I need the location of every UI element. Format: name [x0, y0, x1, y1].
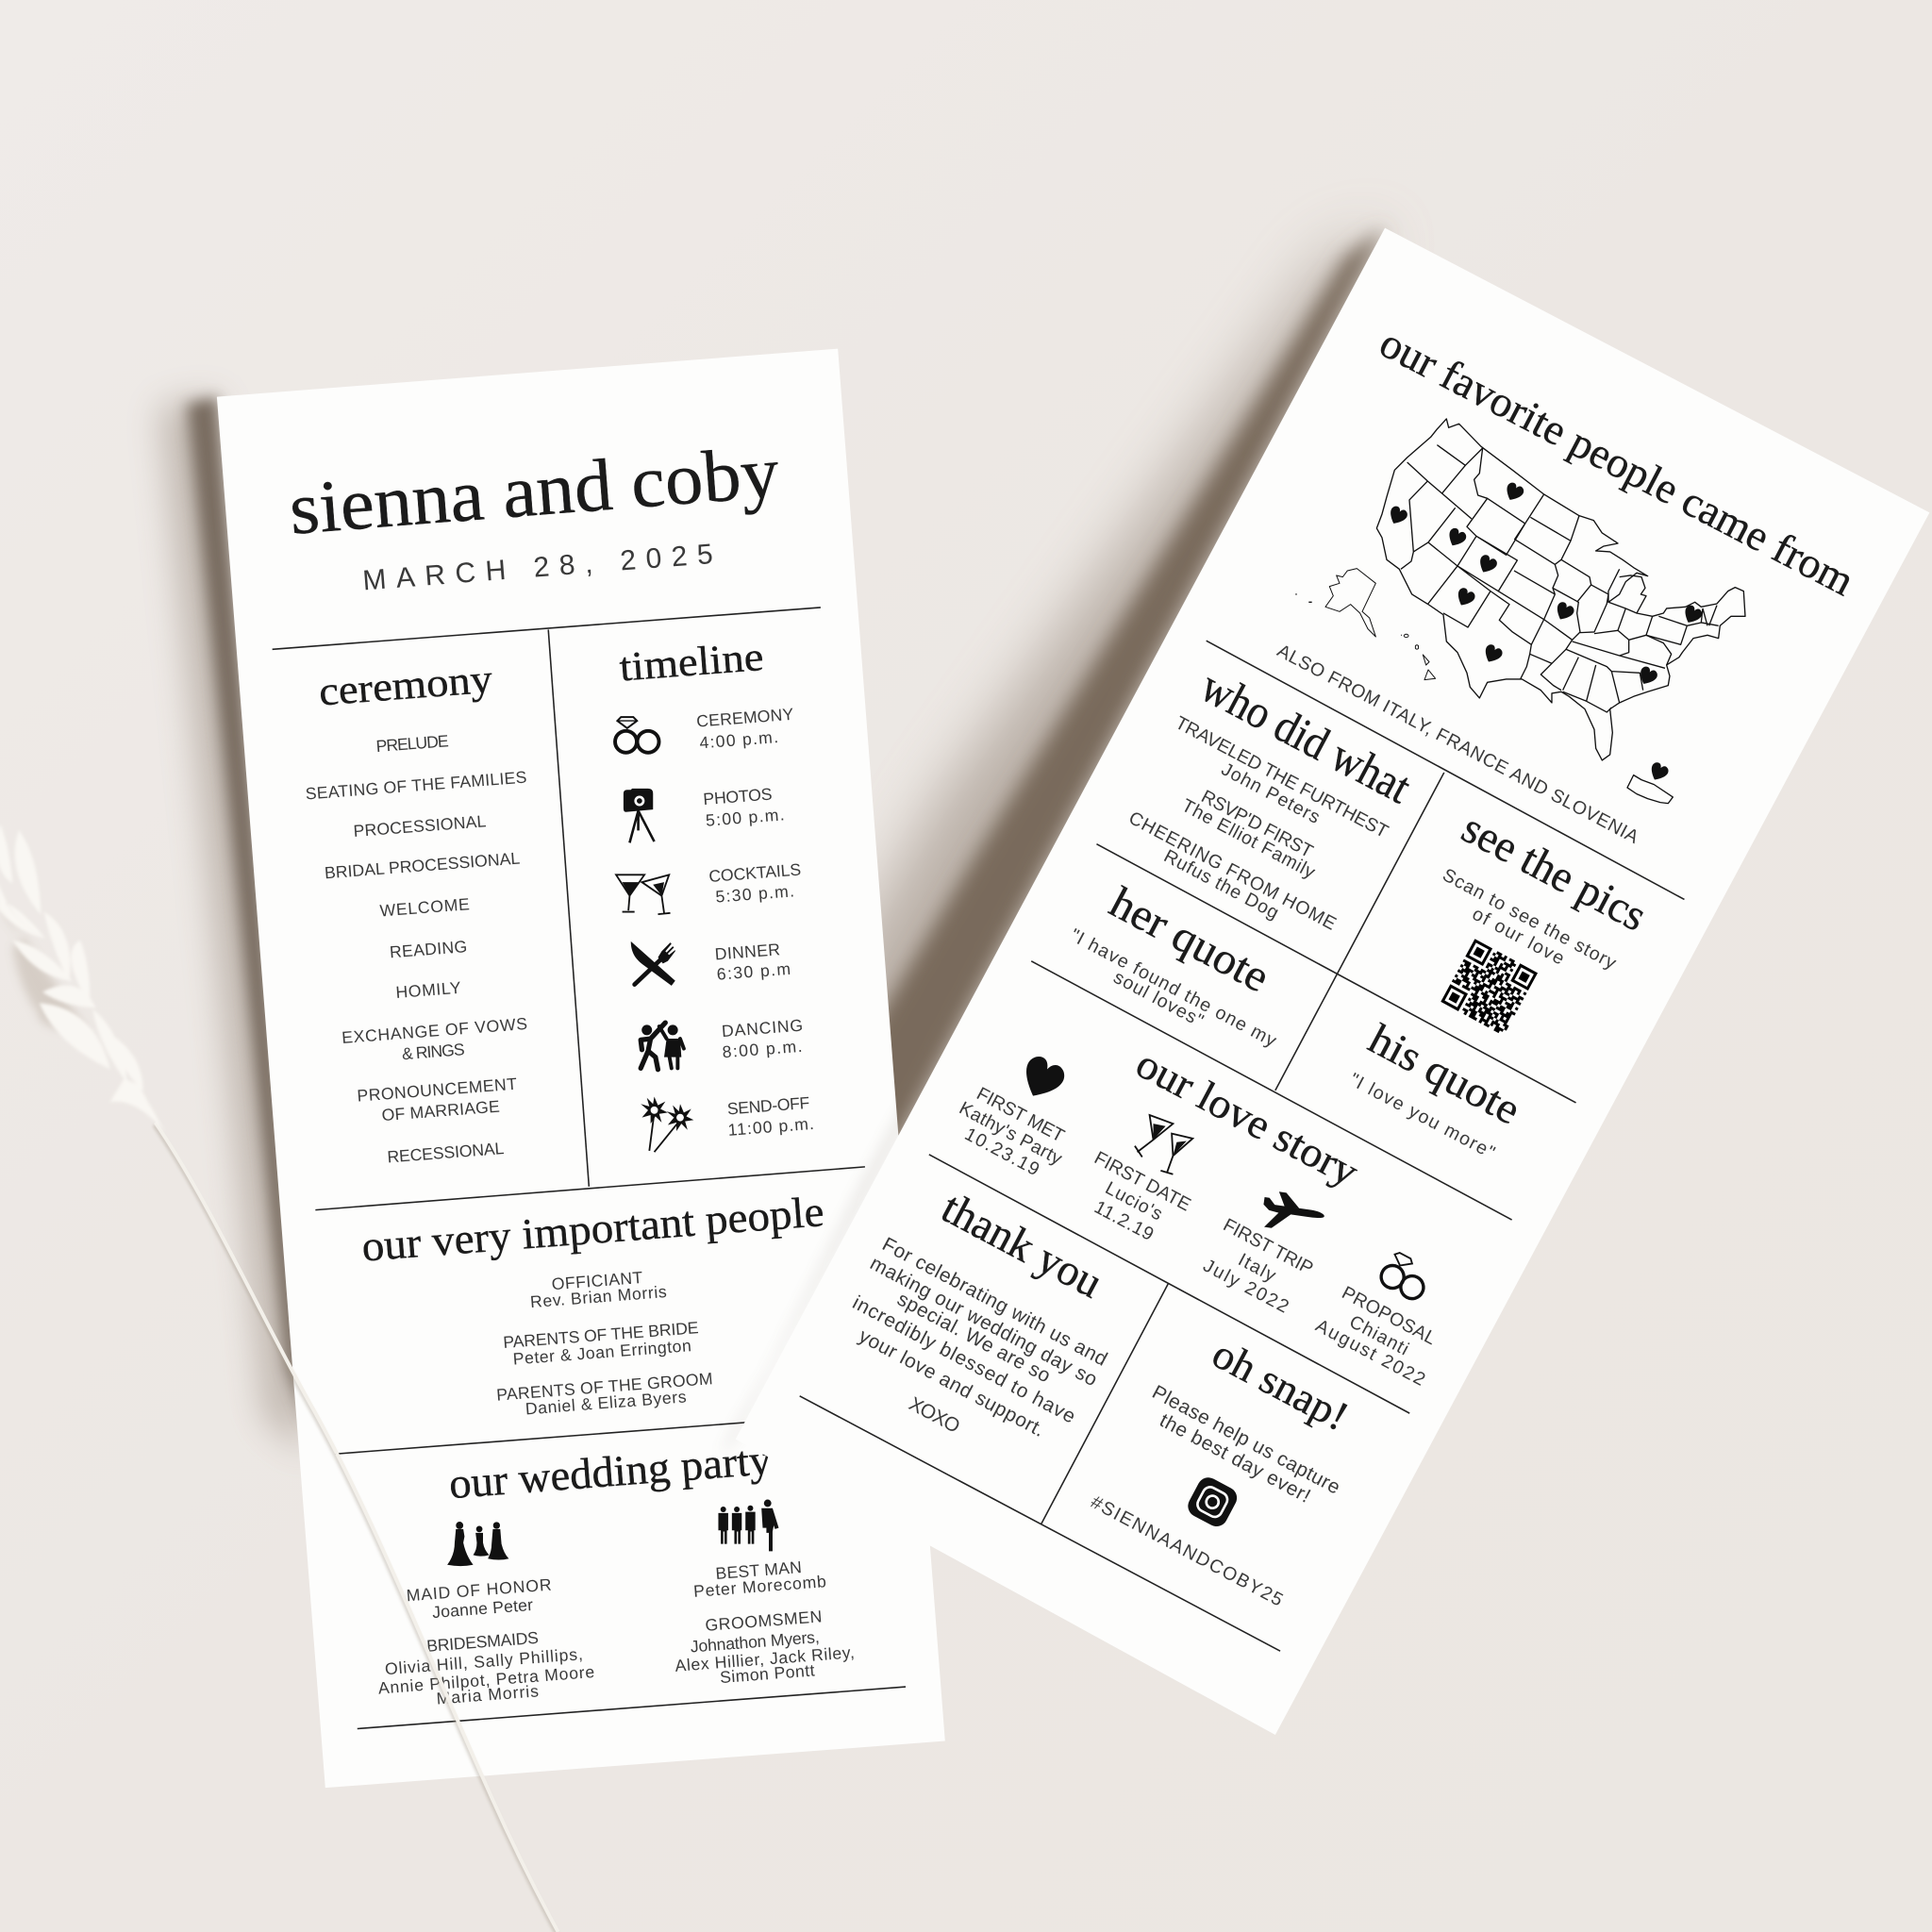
ceremony order list: PRONOUNCEMENT — [357, 1074, 518, 1106]
names list: OFFICIANT — [551, 1268, 643, 1293]
heading: her quote — [1102, 878, 1277, 1002]
awards list: CHEERING FROM HOME — [1125, 808, 1340, 935]
ceremony order list: BRIDAL PROCESSIONAL — [324, 848, 521, 882]
first date text — [1091, 1147, 1194, 1245]
icon: cocktail glasses — [1135, 1115, 1192, 1174]
shadow of right card, dark core — [677, 228, 1385, 1392]
heading: our very important people — [360, 1187, 825, 1271]
icon: cocktail glasses — [616, 874, 671, 914]
awards list: John Peters — [1218, 758, 1324, 828]
heading: our love story — [1128, 1040, 1367, 1196]
proposal text: PROPOSAL — [1339, 1282, 1440, 1349]
stem — [154, 1123, 558, 1932]
text: dinner time: DINNER — [714, 940, 781, 964]
date: MARCH 28, 2025 — [361, 539, 714, 597]
quote text: "I love you more" — [1346, 1069, 1498, 1163]
thank you message: XOXO — [906, 1393, 963, 1438]
proposal text — [1312, 1282, 1440, 1391]
icon: instagram — [1184, 1474, 1241, 1530]
first trip text: July 2022 — [1200, 1256, 1292, 1318]
ceremony order list: & RINGS — [401, 1040, 465, 1063]
text: photos time: PHOTOS — [703, 785, 773, 808]
panel: her quote — [1067, 878, 1280, 1052]
shadow of left card, soft — [160, 397, 308, 1454]
text: also from: ALSO FROM ITALY, FRANCE AND SLOVENIA — [1274, 641, 1642, 848]
thank you message: special. We are so — [893, 1288, 1054, 1387]
text: send-off time: SEND-OFF — [726, 1093, 810, 1118]
awards list: RSVP'D FIRST — [1198, 786, 1316, 862]
bride side names: Olivia Hill, Sally Phillips, — [384, 1644, 583, 1678]
panel: left card, wedding program — [217, 349, 945, 1788]
title: sienna and coby — [287, 430, 782, 550]
thank you message: making our wedding day so — [867, 1253, 1101, 1391]
names list: Peter & Joan Errington — [512, 1336, 691, 1369]
heading: oh snap! — [1205, 1329, 1357, 1440]
names list: PARENTS OF THE BRIDE — [503, 1318, 699, 1352]
groom side names: Johnathon Myers, — [690, 1627, 820, 1657]
heading: who did what — [1192, 660, 1420, 813]
bride side names: BRIDESMAIDS — [426, 1628, 540, 1656]
panel: right card, guest details — [736, 228, 1929, 1735]
heading: ceremony: ceremony — [317, 658, 494, 715]
proposal text: Chianti — [1346, 1311, 1412, 1359]
text: dinner time: 6:30 p.m — [716, 959, 791, 984]
groom side names: Alex Hillier, Jack Riley, — [675, 1642, 855, 1675]
bride side names: Annie Philpot, Petra Moore — [377, 1662, 595, 1698]
icon: wedding rings — [615, 717, 659, 753]
names list: Daniel & Eliza Byers — [525, 1387, 687, 1418]
text: photos time: 5:00 p.m. — [705, 805, 785, 830]
icon: bridesmaids silhouettes — [447, 1522, 508, 1566]
panel: who did what — [1125, 660, 1420, 935]
text: photos time — [703, 785, 785, 830]
text: dancing time: 8:00 p.m. — [722, 1037, 803, 1061]
text: cocktails time — [708, 860, 802, 907]
text: ceremony time — [696, 705, 794, 752]
ceremony order list: WELCOME — [379, 894, 470, 920]
ceremony order list: OF MARRIAGE — [381, 1097, 500, 1124]
names list: PARENTS OF THE GROOM — [495, 1369, 713, 1405]
panel: thank you — [849, 1183, 1111, 1441]
awards list: Rufus the Dog — [1160, 845, 1282, 924]
text: send-off time: 11:00 p.m. — [727, 1114, 815, 1140]
first date text: Lucio's — [1102, 1177, 1166, 1225]
icon: dancing couple — [641, 1023, 684, 1070]
US map with hearts — [1295, 419, 1745, 804]
bride side names — [377, 1575, 595, 1708]
ceremony order list: READING — [389, 937, 468, 961]
groom side names: GROOMSMEN — [705, 1607, 823, 1635]
panel: our love story — [956, 1040, 1440, 1391]
text: Please help us capture — [1149, 1381, 1343, 1499]
names list: Rev. Brian Morris — [529, 1282, 668, 1311]
awards list: The Elliot Family — [1178, 795, 1319, 883]
thank you message: your love and support. — [855, 1325, 1048, 1441]
panel: his quote — [1346, 1014, 1528, 1163]
ceremony order list: HOMILY — [395, 978, 462, 1002]
text: dinner time — [714, 940, 791, 984]
icon: sparklers — [641, 1096, 693, 1152]
shadow of right card, soft penumbra — [628, 228, 1385, 1343]
groom side names: Peter Morecomb — [692, 1572, 827, 1601]
first trip text — [1200, 1214, 1316, 1318]
panel: oh snap — [1088, 1329, 1357, 1610]
panel: see the pics — [1439, 804, 1655, 1036]
proposal text: August 2022 — [1312, 1315, 1428, 1391]
icon: camera on tripod — [624, 789, 655, 842]
quote text: "I have found the one my — [1067, 924, 1280, 1052]
panel: timeline — [615, 635, 815, 1152]
heading: see the pics — [1454, 804, 1655, 941]
first date text: FIRST DATE — [1091, 1147, 1194, 1216]
ceremony order list: RECESSIONAL — [387, 1139, 505, 1167]
ceremony order list: PRELUDE — [375, 731, 449, 756]
heading: our wedding party — [447, 1435, 773, 1507]
hashtag: #SIENNAANDCOBY25 — [1088, 1491, 1287, 1610]
feathery seed head — [0, 824, 165, 1132]
awards list — [1125, 712, 1391, 935]
ceremony order list: EXCHANGE OF VOWS — [341, 1014, 528, 1047]
first met text: FIRST MET — [974, 1083, 1068, 1147]
icon: groomsmen silhouettes — [718, 1500, 778, 1551]
heading: his quote — [1361, 1014, 1528, 1134]
first trip text: FIRST TRIP — [1220, 1214, 1316, 1279]
heading: our favorite people came from: our favorite people came from — [1373, 318, 1862, 605]
bride side names: Maria Morris — [436, 1681, 540, 1708]
bride side names: Joanne Peter — [431, 1595, 534, 1622]
text: ceremony time: 4:00 p.m. — [699, 727, 779, 752]
text: Scan to see the story — [1439, 864, 1620, 974]
heading: timeline: timeline — [618, 635, 765, 691]
thank you message: incredibly blessed to have — [849, 1291, 1079, 1428]
panel: ceremony — [305, 658, 528, 1167]
groom side names: Simon Pontt — [719, 1660, 815, 1687]
quote text: soul loves" — [1110, 967, 1207, 1031]
ceremony order list — [305, 731, 528, 1167]
icon: crossed knife and fork — [631, 941, 675, 986]
text: send-off time — [726, 1093, 815, 1140]
bride side names: MAID OF HONOR — [406, 1575, 552, 1605]
ceremony order list: PROCESSIONAL — [353, 811, 487, 841]
map outline and state lines — [1295, 419, 1745, 804]
icon: QR code — [1441, 939, 1538, 1036]
first trip text: Italy — [1235, 1249, 1279, 1287]
text: ceremony time: CEREMONY — [696, 705, 794, 731]
names list — [495, 1268, 713, 1418]
shadow of left card, core — [188, 397, 308, 1429]
icon: heart — [1016, 1053, 1069, 1105]
text: of our love — [1469, 904, 1568, 969]
hearts on visited states — [1386, 481, 1704, 784]
heading: thank you — [934, 1183, 1110, 1307]
thank you message: For celebrating with us and — [878, 1233, 1111, 1371]
icon: wedding rings — [1377, 1250, 1434, 1303]
awards list: TRAVELED THE FURTHEST — [1172, 712, 1391, 842]
faint shadow of right card falling on left card — [718, 228, 1385, 1457]
icon: airplane — [1260, 1190, 1326, 1235]
first met text: Kathy's Party — [956, 1098, 1066, 1170]
text: dancing time — [721, 1016, 804, 1061]
panel: our very important people — [360, 1187, 825, 1418]
text: cocktails time: 5:30 p.m. — [715, 881, 795, 907]
dried wheat sprig — [0, 824, 558, 1932]
first date text: 11.2.19 — [1091, 1197, 1158, 1245]
groom side names: BEST MAN — [715, 1557, 802, 1583]
panel: our wedding party — [377, 1435, 855, 1708]
first met text: 10.23.19 — [961, 1124, 1042, 1180]
groom side names — [675, 1557, 855, 1687]
text: cocktails time: COCKTAILS — [708, 860, 802, 886]
text: dancing time: DANCING — [721, 1016, 804, 1041]
thank you message — [849, 1233, 1111, 1441]
ceremony order list: SEATING OF THE FAMILIES — [305, 768, 527, 804]
text: the best day ever! — [1156, 1409, 1314, 1507]
